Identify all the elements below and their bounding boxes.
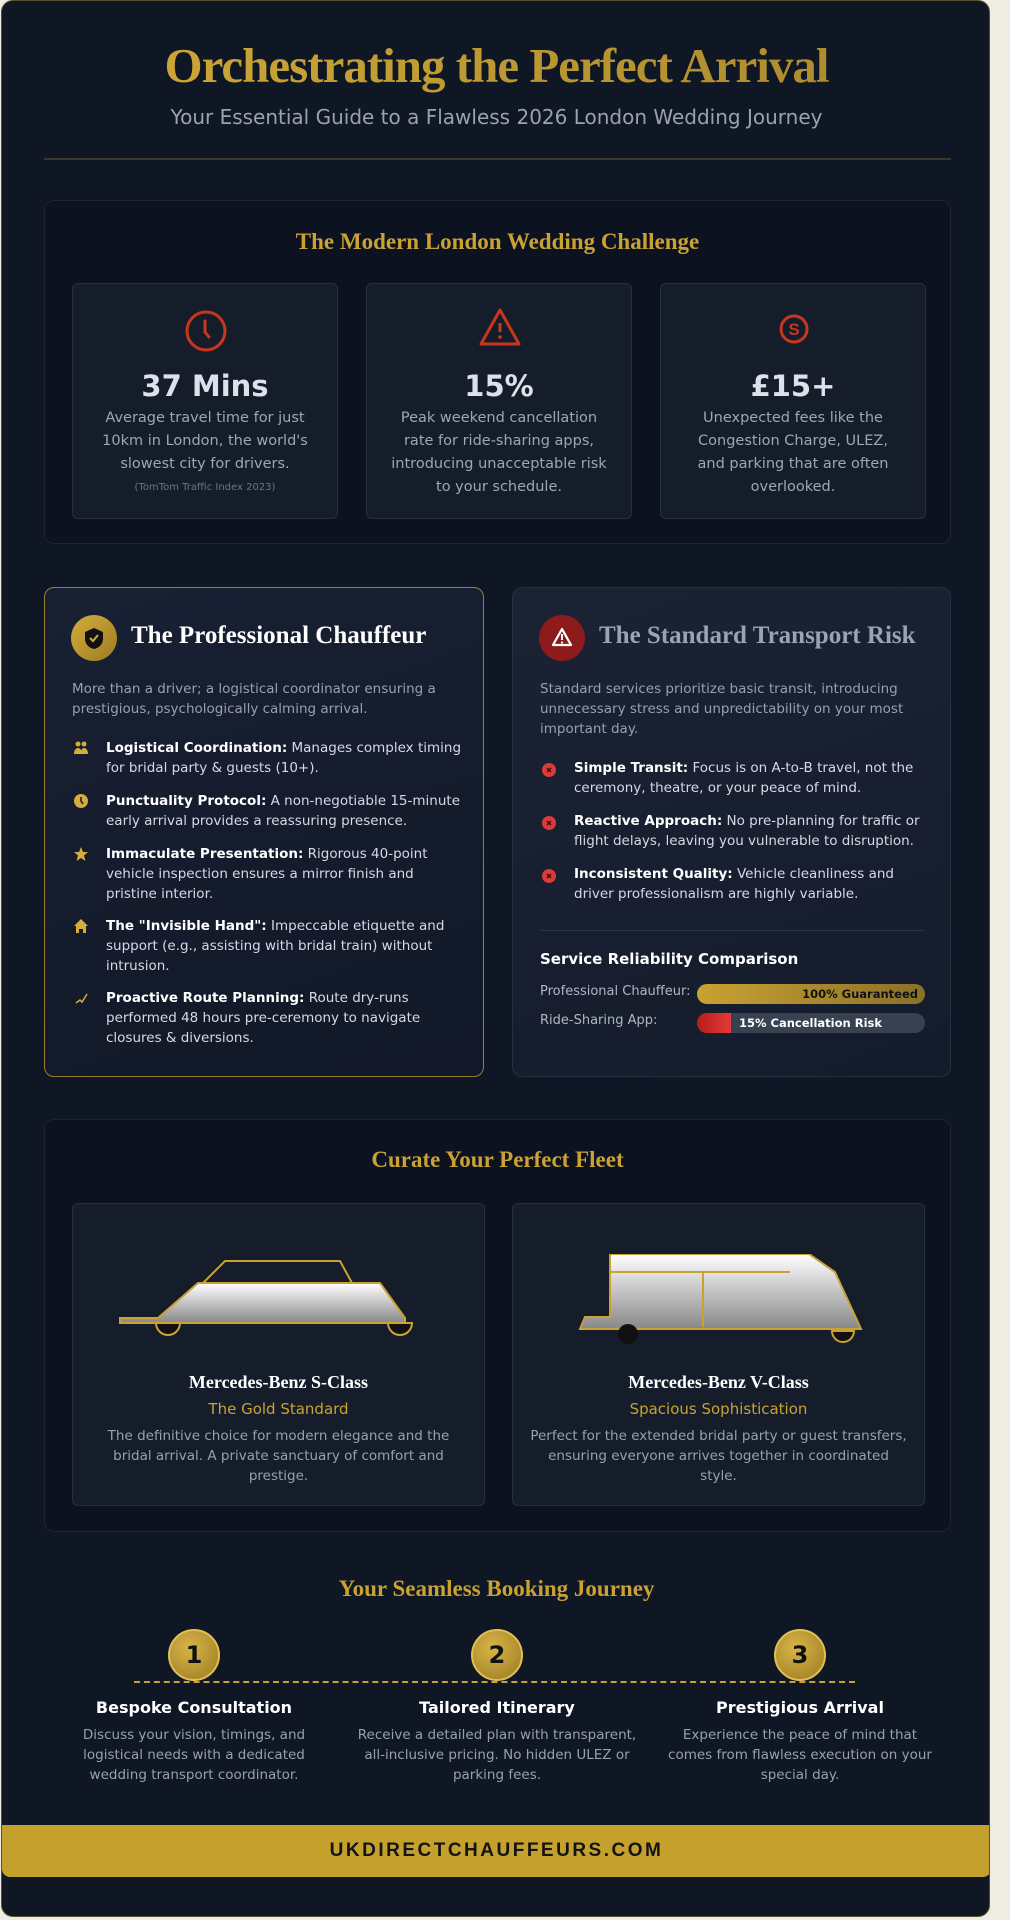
- intro: Standard services prioritize basic transit, introducing unnecessary stress and unpredictability on your most important day.: [540, 681, 903, 737]
- step 3: 3: [792, 1641, 808, 1669]
- list: risks: Inconsistent Quality: Vehicle cleanliness and driver professionalism are highly variable.: [574, 866, 894, 902]
- panel: professional chauffeur: [44, 587, 484, 1077]
- intro: More than a driver; a logistical coordinator ensuring a prestigious, psychologically calming arrival.: [72, 681, 436, 717]
- stat card: £15+: [660, 283, 926, 519]
- list: risks: Simple Transit: Focus is on A-to-B travel, not the ceremony, theatre, or your peace of mind.: [574, 760, 913, 796]
- chart: reliability comparison: Ride-Sharing App:: [540, 1013, 657, 1028]
- icon: sedan: [119, 1260, 413, 1336]
- chart: reliability comparison: [540, 950, 925, 1033]
- chart: reliability comparison: 15% Cancellation Risk: [739, 1016, 882, 1030]
- heading: booking journey: Your Seamless Booking Journey: [339, 1576, 654, 1601]
- icon: van: [578, 1254, 862, 1344]
- list: benefits: Immaculate Presentation: Rigorous 40-point vehicle inspection ensures a mirror finish and pristine interior.: [106, 846, 428, 902]
- chart: reliability comparison: Service Reliability Comparison: [540, 950, 798, 968]
- list: benefits: The "Invisible Hand": Impeccable etiquette and support (e.g., assisting with bridal train) without intrusion.: [106, 918, 444, 974]
- step 1: Bespoke Consultation: [96, 1698, 292, 1717]
- chart: reliability comparison: Professional Chauffeur:: [540, 984, 690, 999]
- stat card: 15%: Peak weekend cancellation rate for ride-sharing apps, introducing unacceptable risk to your schedule.: [391, 410, 607, 495]
- card: S-Class: Mercedes-Benz S-Class: [189, 1372, 368, 1392]
- card: S-Class: The Gold Standard: [208, 1400, 349, 1418]
- card: V-Class: Perfect for the extended bridal party or guest transfers, ensuring everyone arrives together in coordinated style.: [530, 1428, 907, 1484]
- heading: The Standard Transport Risk: [599, 622, 916, 649]
- title: Orchestrating the Perfect Arrival: [164, 38, 829, 93]
- step 2: 2: [489, 1641, 505, 1669]
- step 1: 1: [186, 1641, 202, 1669]
- stat card: 37 mins: 37 Mins: [141, 369, 269, 403]
- stat card: 37 mins: Average travel time for just 10km in London, the world's slowest city for drivers.: [102, 410, 308, 472]
- card: V-Class: Spacious Sophistication: [630, 1400, 807, 1418]
- list: risks: Reactive Approach: No pre-planning for traffic or flight delays, leaving you vulnerable to disruption.: [574, 813, 920, 849]
- heading: The Professional Chauffeur: [131, 622, 426, 649]
- list: benefits: [74, 740, 461, 1046]
- step 2: Receive a detailed plan with transparent, all-inclusive pricing. No hidden ULEZ or parking fees.: [358, 1727, 636, 1783]
- stat card: £15+: £15+: [751, 369, 835, 403]
- list: benefits: Punctuality Protocol: A non-negotiable 15-minute early arrival provides a reassuring presence.: [106, 793, 460, 829]
- stat card: 15%: [366, 283, 632, 519]
- title: [2, 37, 991, 94]
- icon: coin: S: [788, 320, 800, 339]
- step 1: Discuss your vision, timings, and logistical needs with a dedicated wedding transport coordinator.: [83, 1727, 305, 1783]
- icon: shield badge: [71, 615, 117, 661]
- icon: warning badge: [539, 615, 585, 661]
- card: S-Class: The definitive choice for modern elegance and the bridal arrival. A private sanctuary of comfort and prestige.: [108, 1428, 449, 1484]
- stat card: 15%: 15%: [464, 369, 534, 403]
- card: S-Class: [72, 1203, 485, 1506]
- icon: coin: [780, 314, 808, 344]
- step 3: [668, 1629, 932, 1783]
- panel: fleet: [44, 1119, 951, 1532]
- footer: [2, 1825, 991, 1877]
- chart: reliability comparison: 100% Guaranteed: [802, 987, 918, 1001]
- panel: challenge: [44, 200, 951, 544]
- heading: challenge: The Modern London Wedding Challenge: [296, 229, 699, 254]
- list: risks: [542, 760, 920, 902]
- footer: UKDIRECTCHAUFFEURS.COM: [330, 1840, 663, 1861]
- list: benefits: Proactive Route Planning: Route dry-runs performed 48 hours pre-ceremony to navigate closures & diversions.: [106, 990, 420, 1046]
- stat card: £15+: Unexpected fees like the Congestion Charge, ULEZ, and parking that are often overlooked.: [698, 410, 888, 495]
- subtitle: Your Essential Guide to a Flawless 2026 London Wedding Journey: [171, 105, 822, 129]
- card: V-Class: Mercedes-Benz V-Class: [628, 1372, 809, 1392]
- icon: warning: [480, 308, 520, 346]
- list: benefits: Logistical Coordination: Manages complex timing for bridal party & guests (10+).: [106, 740, 461, 776]
- heading: fleet: Curate Your Perfect Fleet: [371, 1147, 624, 1172]
- stat card: 37 mins: [72, 283, 338, 519]
- stat card: 37 mins: (TomTom Traffic Index 2023): [135, 482, 275, 493]
- panel: standard transport risk: [512, 587, 951, 1077]
- step 3: Prestigious Arrival: [716, 1698, 884, 1717]
- step 2: Tailored Itinerary: [419, 1698, 575, 1717]
- icon: clock: [186, 310, 226, 352]
- step 1: [83, 1629, 305, 1783]
- step 3: Experience the peace of mind that comes from flawless execution on your special day.: [668, 1727, 932, 1783]
- step 2: [358, 1629, 636, 1783]
- card: V-Class: [512, 1203, 925, 1506]
